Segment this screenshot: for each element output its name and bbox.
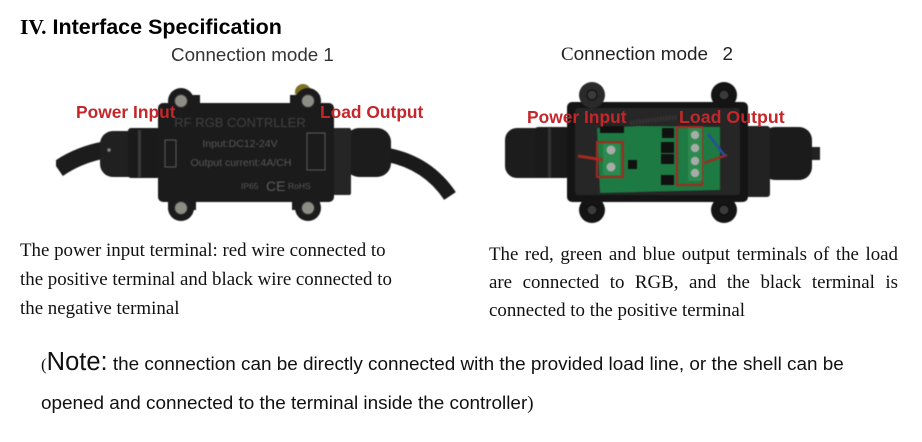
circuit board [597,126,720,193]
text block: load output description: The red, green and blue output terminals of the load [489,244,898,265]
enclosure interior [575,108,740,195]
text block: power input description: The power input terminal: red wire connected to [20,240,386,261]
label: load output, mode 1: Load Output [320,102,423,122]
label: load output, mode 2: Load Output [679,107,785,127]
note: (Note: the connection can be directly connected with the provided load line, or the shell can be [41,348,844,376]
enclosure [567,82,748,223]
load wires [704,134,727,163]
enclosure body [158,88,334,221]
note: opened and connected to the terminal inside the controller) [41,393,534,414]
product print: CE [266,178,285,194]
right gland [746,126,820,197]
product print: IP65 [241,181,259,191]
load output terminal [677,127,702,185]
screws [174,94,314,214]
spring wire [630,117,677,123]
terminal legends [165,133,325,170]
text block: load output description: connected to the positive terminal [489,300,745,321]
right cable gland [333,128,391,195]
note [41,348,844,414]
text block: power input description: the negative terminal [20,298,179,319]
label: power input, mode 2: Power Input [527,107,627,127]
screw holes [587,90,729,215]
text block: power input description: the positive terminal and black wire connected to [20,269,392,290]
left cable [58,150,104,169]
product print: Input:DC12-24V [202,138,278,150]
product print [174,115,311,194]
title: IV. Interface Specification [20,15,282,39]
text block: load output description [489,244,898,321]
text block: load output description: are connected to RGB, and the black terminal is [489,272,898,293]
right cable [388,155,450,196]
heading: connection mode 1: Connection mode 1 [171,44,334,65]
yellow wire hint [295,84,311,100]
left cable gland [100,128,160,178]
label: power input, mode 1: Power Input [76,102,176,122]
product print: Output current:4A/CH [191,157,291,169]
product print: RF RGB CONTRLLER [174,115,306,130]
photo: sealed controller, closed [55,83,456,222]
power input terminal [578,142,623,177]
heading: connection mode 2: Connection mode 2 [561,44,733,65]
left gland [505,127,569,178]
text block: power input description [20,240,392,319]
product print: RoHS [288,181,311,191]
board components [600,126,674,185]
photo: opened controller with circuit board [504,81,821,224]
